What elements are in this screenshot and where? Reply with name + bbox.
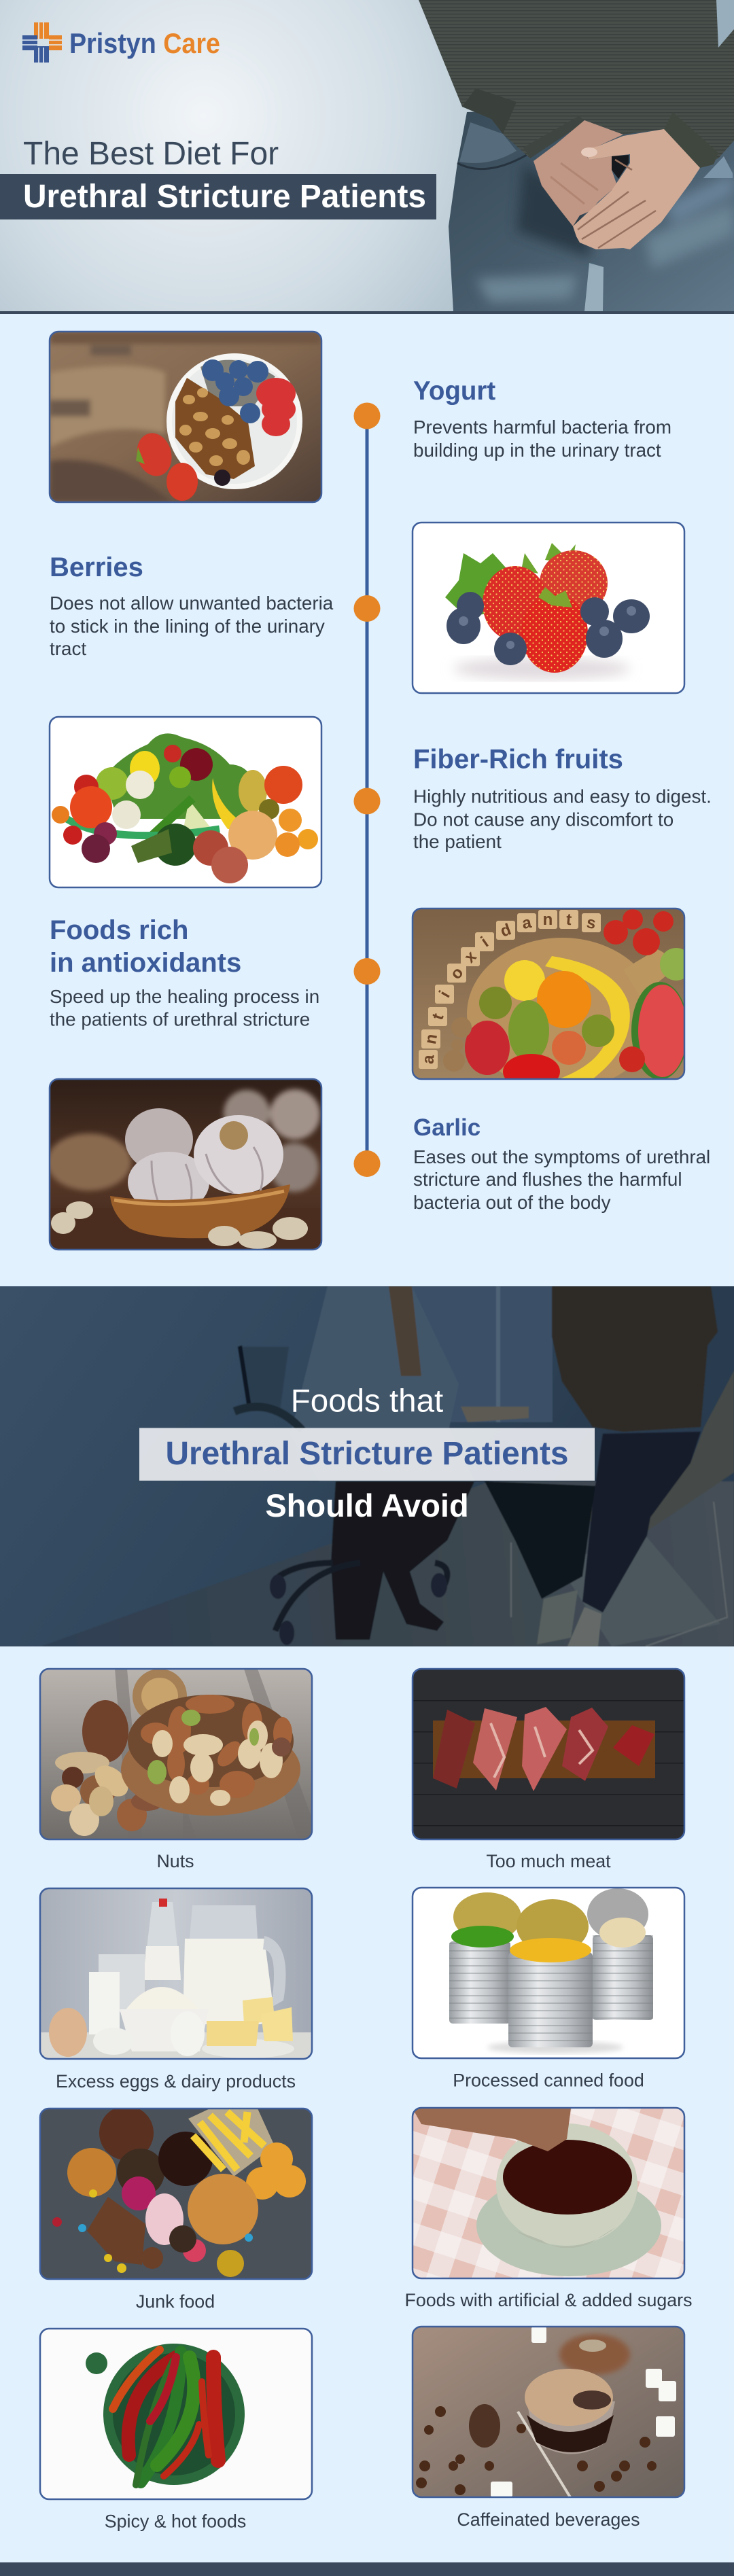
photo: chilies [40,2329,312,2499]
letter blocks: i [436,988,454,1001]
text: foods rich in antioxidants: Foods rich [50,915,188,945]
letter blocks: t [428,1011,448,1023]
text: fiber-rich fruits [413,745,712,852]
photo: tea cup [413,2108,684,2278]
banner heading box [139,1428,595,1481]
letter blocks [419,910,601,1069]
photo: garlic [47,1079,321,1250]
logo wordmark: Pristyn Care [69,27,220,59]
hero title line: The Best Diet For [23,136,279,172]
text: berries: Berries [50,552,143,582]
hero bottom bar [0,311,734,314]
text: fiber-rich fruits: Fiber-Rich fruits [413,745,623,775]
photo: antioxidants [413,908,693,1090]
letter blocks: n [421,1033,441,1046]
label: too much meat: Too much meat [486,1851,611,1871]
text: yogurt: building up in the urinary tract [413,440,661,461]
text: berries [50,552,334,659]
photo: nuts [40,1669,312,1839]
banner heading box: Urethral Stricture Patients [166,1436,568,1472]
jeans [449,102,734,311]
text: berries: to stick in the lining of the urinary [50,616,325,637]
letter blocks: a [419,1054,438,1065]
banner heading: foods that: Foods that [291,1383,443,1419]
chair back [242,1347,288,1407]
hero title banner: Urethral Stricture Patients [23,179,426,215]
food card: nuts [40,1669,312,1871]
food card: caffeinated beverages [413,2327,684,2530]
text: fiber-rich fruits: Do not cause any discomfort to [413,809,674,830]
label: artificial and added sugars: Foods with artificial & added sugars [404,2290,693,2310]
photo: dairy [40,1888,312,2059]
text: foods rich in antioxidants: the patients of urethral stricture [50,1008,310,1030]
text: fiber-rich fruits: Highly nutritious and easy to digest. [413,786,712,807]
photo: cans [413,1888,684,2058]
text: garlic: Garlic [413,1114,480,1141]
shoes [537,1590,578,1644]
letter blocks: n [543,911,553,929]
food card: junk food [40,2106,312,2312]
text: berries: Does not allow unwanted bacteria [50,593,334,614]
label: caffeinated beverages: Caffeinated beverages [457,2509,640,2530]
text: garlic: Eases out the symptoms of urethral [413,1146,710,1167]
logo [22,22,220,63]
food card: processed canned food [413,1888,684,2090]
hands [534,120,623,226]
text: yogurt: Prevents harmful bacteria from [413,417,671,438]
photo: fruits and vegetables [50,717,321,887]
letter blocks: a [521,913,534,933]
text: foods rich in antioxidants: in antioxidants [50,948,241,978]
text: fiber-rich fruits: the patient [413,831,502,852]
label: nuts: Nuts [156,1851,194,1871]
letter blocks: x [461,947,480,967]
cuffs [523,116,584,158]
photo: yogurt bowl [50,332,321,502]
logo icon [22,22,62,63]
text: garlic: bacteria out of the body [413,1192,611,1213]
letter blocks: d [498,920,514,941]
banner: foods to avoid background photo [0,1286,734,1646]
text: garlic: stricture and flushes the harmful [413,1169,682,1190]
photo: meat [413,1669,684,1839]
letter blocks: o [447,964,467,983]
legs [485,1481,599,1599]
text: yogurt [413,376,671,461]
photo: junk food [40,2106,312,2279]
hero panel [0,0,734,311]
label: eggs and dairy: Excess eggs & dairy products [56,2071,296,2092]
timeline line [366,416,368,1163]
curtain [412,1286,553,1422]
text: berries: tract [50,638,86,659]
label: processed canned food: Processed canned food [453,2070,644,2090]
letter blocks: i [478,933,492,951]
shirt [419,0,734,168]
photo: strawberries and blueberries [413,523,684,693]
label: junk food: Junk food [136,2291,215,2312]
text: foods rich in antioxidants: Speed up the healing process in [50,986,319,1007]
text: yogurt: Yogurt [413,376,495,406]
footer bar [0,2562,734,2576]
letter blocks: s [585,913,597,933]
food card: artificial and added sugars [404,2108,693,2310]
food card: spicy and hot foods [40,2329,312,2532]
text: garlic [413,1114,710,1213]
label: spicy and hot foods: Spicy & hot foods [105,2511,246,2532]
doctor coat [290,1286,474,1481]
banner heading: should avoid: Should Avoid [265,1487,469,1523]
hand card [461,1407,529,1422]
food card: too much meat [413,1669,684,1871]
photo: coffee [413,2327,684,2497]
letter blocks: t [565,911,572,929]
floor [41,1481,734,1646]
right person shirt [552,1286,718,1432]
food card: excess eggs and dairy [40,1888,312,2092]
timeline dots [353,402,381,1177]
text: foods rich in antioxidants [50,915,319,1030]
right chair [647,1371,734,1531]
